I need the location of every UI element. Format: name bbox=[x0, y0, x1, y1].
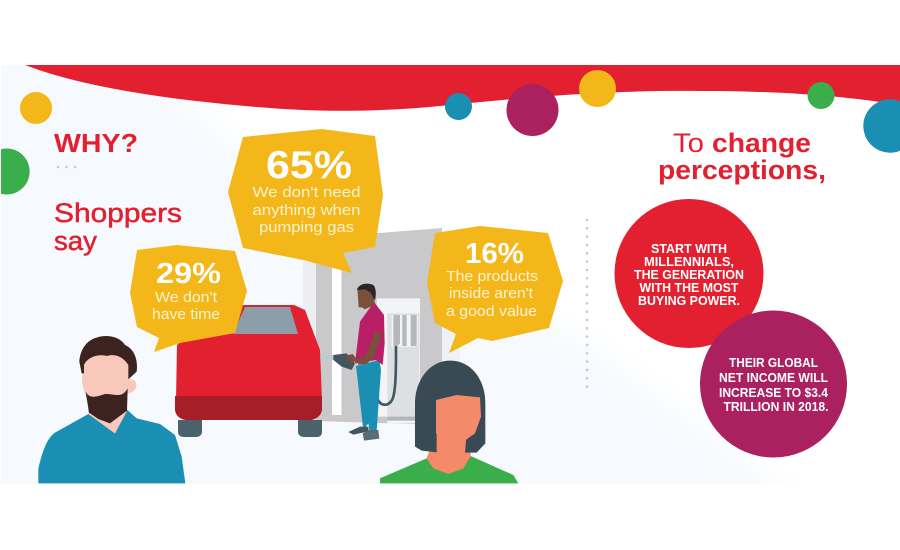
callout circle: net income bbox=[700, 310, 847, 458]
speech bubble: 29%: 29% bbox=[156, 258, 221, 290]
callout circle: net income: TRILLION IN 2018. bbox=[724, 399, 828, 414]
speech bubble: 65%: We don't need bbox=[252, 184, 360, 201]
callout circle: millennials: MILLENNIALS, bbox=[644, 254, 734, 269]
speech bubble: 29%: have time bbox=[152, 306, 220, 323]
speech bubble: 16%: a good value bbox=[446, 303, 537, 320]
neck bbox=[88, 403, 127, 433]
dotted accent under heading bbox=[57, 166, 76, 168]
beard bbox=[86, 388, 128, 423]
infographic canvas bbox=[1, 65, 900, 484]
shirt bbox=[355, 302, 385, 365]
neck bbox=[427, 433, 471, 474]
callout circle: millennials: START WITH bbox=[651, 241, 727, 256]
back hair bbox=[415, 361, 485, 453]
shoes bbox=[348, 427, 369, 435]
fuel pump bbox=[374, 298, 420, 423]
vertical dotted divider bbox=[586, 220, 588, 388]
callout circle: millennials: BUYING POWER. bbox=[638, 293, 740, 308]
decorative circles bbox=[1, 70, 900, 194]
heading: to change perceptions: perceptions, bbox=[658, 155, 826, 185]
speech bubble: 16% bbox=[427, 226, 563, 353]
speech bubble: 65%: 65% bbox=[266, 144, 352, 187]
callout circle: millennials bbox=[614, 199, 764, 348]
green top bbox=[380, 456, 518, 483]
person pumping gas bbox=[320, 284, 385, 441]
callout circle: millennials: THE GENERATION bbox=[634, 267, 744, 282]
speech bubble: 65% bbox=[228, 129, 383, 273]
speech bubble: 65%: anything when bbox=[252, 202, 360, 219]
heading: to change perceptions: change bbox=[712, 128, 811, 158]
heading: to change perceptions bbox=[658, 128, 826, 185]
face bbox=[436, 395, 481, 444]
head bbox=[357, 288, 375, 309]
callout circle: millennials: WITH THE MOST bbox=[640, 280, 739, 295]
heading: shoppers say: Shoppers bbox=[54, 198, 182, 228]
hair bbox=[79, 336, 137, 379]
gas station building bbox=[303, 228, 460, 425]
speech bubble: 65%: pumping gas bbox=[259, 219, 354, 236]
nozzle bbox=[320, 355, 333, 360]
callout circle: net income: NET INCOME WILL bbox=[719, 370, 828, 385]
speech bubble: 16%: 16% bbox=[465, 238, 524, 270]
shirt bbox=[38, 409, 185, 483]
speech bubble: 29%: We don't bbox=[155, 289, 218, 306]
heading: shoppers say: say bbox=[54, 226, 97, 256]
callout circle: net income: THEIR GLOBAL bbox=[729, 355, 818, 370]
jeans bbox=[356, 360, 381, 430]
speech bubble: 16%: The products bbox=[446, 268, 538, 285]
heading: to change perceptions: To bbox=[673, 128, 704, 158]
heading: shoppers say bbox=[54, 198, 182, 256]
arm bbox=[357, 332, 382, 365]
person: bearded man bbox=[38, 336, 185, 483]
speech bubble: 16%: inside aren't bbox=[449, 285, 534, 302]
speech bubble: 29% bbox=[130, 245, 247, 352]
callout circle: net income: INCREASE TO $3.4 bbox=[719, 385, 829, 400]
person: woman with dark bob bbox=[380, 361, 518, 483]
face bbox=[82, 350, 136, 410]
heading: why: WHY? bbox=[54, 128, 138, 158]
red wave banner bbox=[25, 65, 900, 111]
car bbox=[175, 305, 322, 437]
